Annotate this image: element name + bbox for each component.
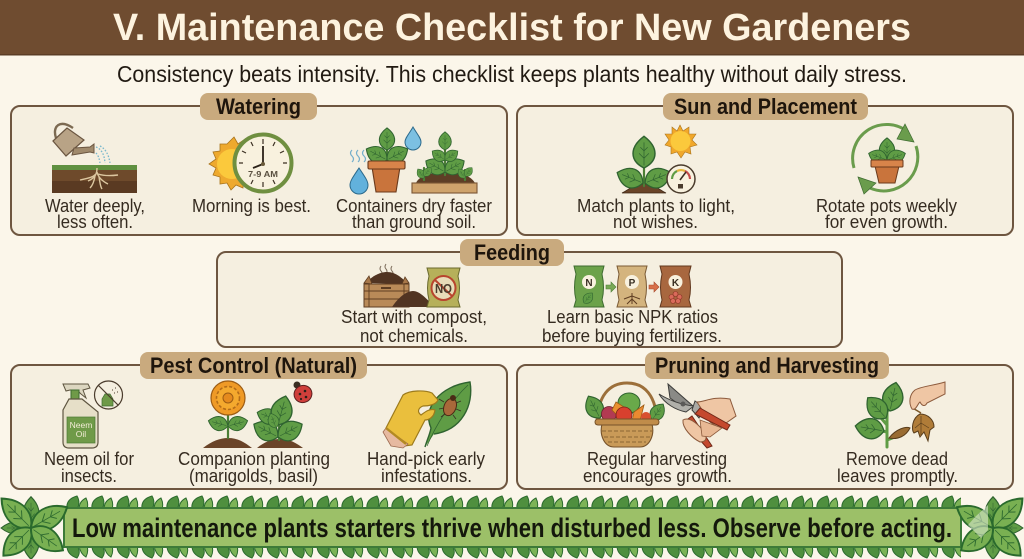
captions: feeding: Start with compost, [341, 307, 487, 327]
icon: gloved hand picking beetle off leaf [383, 382, 471, 448]
icon: marigold, basil and ladybug [203, 381, 315, 448]
icon: pruners in hand [659, 384, 736, 448]
icon: sun and clock 7-9 AM [209, 134, 292, 192]
captions: watering [45, 196, 492, 232]
captions: pest control: Neem oil for [44, 449, 134, 469]
captions: pruning and harvesting: encourages growth. [583, 466, 732, 486]
captions: feeding: Learn basic NPK ratios [547, 307, 718, 327]
header banner [0, 0, 1024, 56]
captions: pruning and harvesting: leaves promptly. [837, 466, 958, 486]
icon: right leaf cluster [952, 491, 1024, 559]
heading: watering: Watering [216, 94, 301, 119]
captions: watering: less often. [57, 212, 133, 232]
captions: pruning and harvesting [583, 449, 958, 486]
captions: pest control [44, 449, 485, 486]
captions: watering: Morning is best. [192, 196, 311, 216]
captions: sun and placement: for even growth. [825, 212, 948, 232]
icon: vegetable basket [581, 383, 669, 447]
icon: NPK fertilizer bags [574, 266, 691, 307]
panel: pruning and harvesting [517, 352, 1013, 489]
icon: rotating potted plant [853, 124, 918, 194]
icon: compost bin and no-chemicals bag [364, 264, 460, 307]
heading: feeding: Feeding [474, 240, 550, 265]
captions: feeding: before buying fertilizers. [542, 326, 722, 346]
icon: plant, sun and light meter [614, 125, 697, 193]
captions: watering: than ground soil. [352, 212, 476, 232]
captions: pest control: (marigolds, basil) [189, 466, 318, 486]
footer banner with leaf border [0, 491, 1024, 559]
N label: N [585, 278, 593, 289]
captions: feeding [341, 307, 722, 346]
icon: left leaf cluster [0, 491, 72, 559]
captions: feeding: not chemicals. [360, 326, 468, 346]
K label: K [672, 278, 680, 289]
panel: feeding [217, 239, 842, 347]
P label: P [629, 278, 636, 289]
captions: pruning and harvesting: Regular harvesting [587, 449, 727, 469]
captions: pest control: infestations. [381, 466, 472, 486]
captions: pest control: Hand-pick early [367, 449, 485, 469]
panel: watering [11, 93, 507, 235]
captions: pruning and harvesting: Remove dead [846, 449, 948, 469]
bottle label: Neem [70, 420, 92, 430]
bag label: NO [435, 281, 452, 296]
captions: sun and placement [577, 196, 957, 232]
clock label: 7-9 AM [248, 169, 278, 179]
heading: pruning and harvesting: Pruning and Harvesting [655, 353, 879, 378]
captions: watering: Containers dry faster [336, 196, 492, 216]
captions: pest control: Companion planting [178, 449, 330, 469]
captions: pest control: insects. [61, 466, 117, 486]
bottle label: Oil [76, 429, 86, 439]
icon: plant and hand removing dead leaf [854, 380, 945, 447]
icon: potted plant, raised bed and water drops [350, 127, 477, 194]
panel: sun and placement [517, 93, 1013, 235]
heading: pest control: Pest Control (Natural) [150, 353, 357, 378]
subtitle: Consistency beats intensity. This checklist keeps plants healthy without daily stress. [117, 61, 907, 87]
captions: sun and placement: not wishes. [613, 212, 698, 232]
icon: watering can over soil and roots [52, 124, 137, 193]
captions: watering: Water deeply, [45, 196, 145, 216]
panel: pest control [11, 352, 507, 489]
title: V. Maintenance Checklist for New Gardeners [113, 7, 911, 49]
captions: sun and placement: Match plants to light, [577, 196, 735, 216]
icon: neem oil spray bottle [63, 381, 122, 448]
heading: sun and placement: Sun and Placement [674, 94, 858, 119]
captions: sun and placement: Rotate pots weekly [816, 196, 957, 216]
